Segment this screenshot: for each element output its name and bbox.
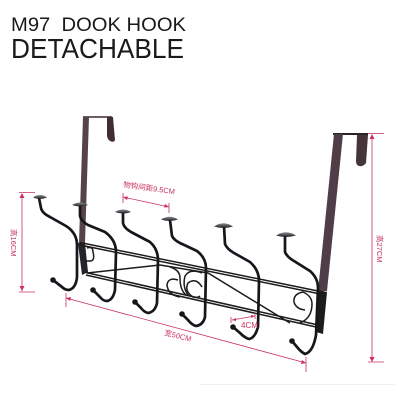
dimension: hook depth 4CM: 4CM xyxy=(241,321,258,330)
title: DETACHABLE xyxy=(11,33,184,64)
dimension: right height 27CM: 高27CM xyxy=(375,235,385,263)
dimension: hook depth 4CM xyxy=(231,313,258,330)
dimension: right height 27CM xyxy=(368,134,385,362)
left door bracket xyxy=(78,117,115,275)
hook 1 xyxy=(39,198,77,290)
right door bracket xyxy=(316,134,368,334)
door hook rack xyxy=(33,117,368,354)
frame rails xyxy=(80,242,318,327)
dimension: hook spacing 9.5CM xyxy=(123,179,176,213)
hook 4 xyxy=(170,220,206,326)
hook 3 xyxy=(123,212,158,313)
title xyxy=(11,14,186,64)
hook 5 xyxy=(224,226,259,339)
dimension: width 50CM: 宽50CM xyxy=(164,327,193,344)
hooks xyxy=(39,198,318,354)
floor line xyxy=(200,384,395,386)
dimension: width 50CM xyxy=(66,293,306,372)
dimension: hook spacing 9.5CM: 物钩间距9.5CM xyxy=(123,179,176,196)
dimension: left height 16CM: 高16CM xyxy=(9,229,19,257)
hook 6 xyxy=(285,235,318,354)
dimension: left height 16CM xyxy=(9,192,35,292)
hook caps and tips xyxy=(33,195,296,344)
frame scrollwork xyxy=(86,248,312,323)
title: M97 DOOK HOOK xyxy=(11,14,186,36)
hook 2 xyxy=(80,205,116,301)
